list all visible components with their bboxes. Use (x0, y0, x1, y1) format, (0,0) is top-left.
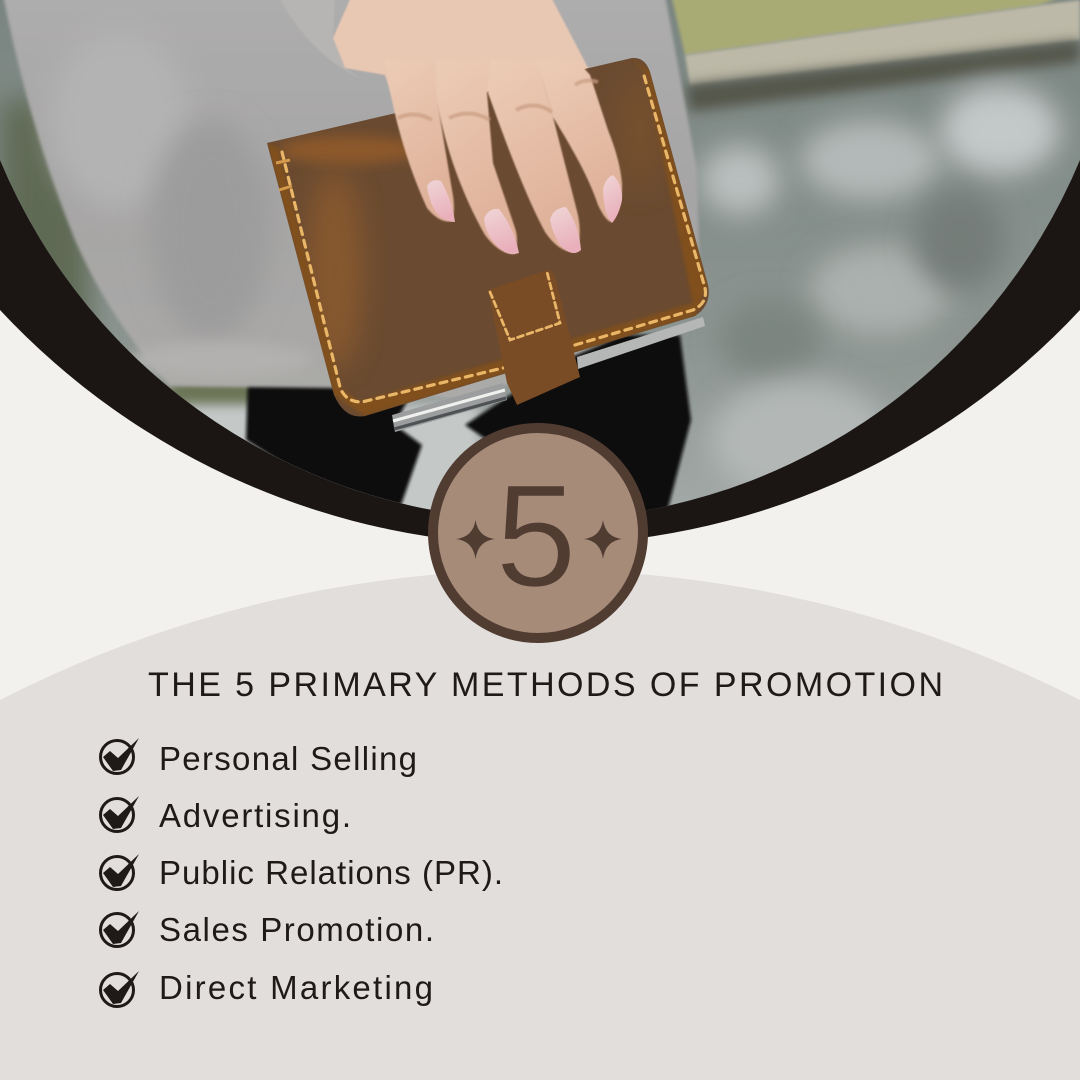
item: direct marketing: Direct Marketing (159, 969, 433, 1006)
sparkle left (456, 520, 495, 559)
grey sweater (3, 0, 700, 400)
fingers (385, 60, 622, 254)
item: advertising: Advertising. (159, 797, 351, 834)
sparkle right (584, 520, 622, 559)
item: public relations: Public Relations (PR). (159, 854, 503, 891)
wallet clasp tab (488, 270, 580, 405)
pink nails (427, 175, 622, 254)
photo: woman holding leather wallet (0, 0, 1080, 560)
dark ring behind photo (0, 0, 1080, 545)
wallet (267, 58, 709, 432)
item: personal selling: Personal Selling (159, 740, 417, 777)
heading: THE 5 PRIMARY METHODS OF PROMOTION (148, 666, 943, 704)
item: sales promotion: Sales Promotion. (159, 911, 434, 948)
lower panel arc (0, 570, 1080, 1080)
wallet stitching (282, 72, 706, 402)
number five: 5 (495, 454, 577, 617)
number badge (433, 428, 643, 638)
list of promotion methods (100, 738, 503, 1006)
photo background (0, 0, 1080, 560)
black trousers (246, 335, 691, 520)
hand: back of hand (333, 0, 597, 105)
